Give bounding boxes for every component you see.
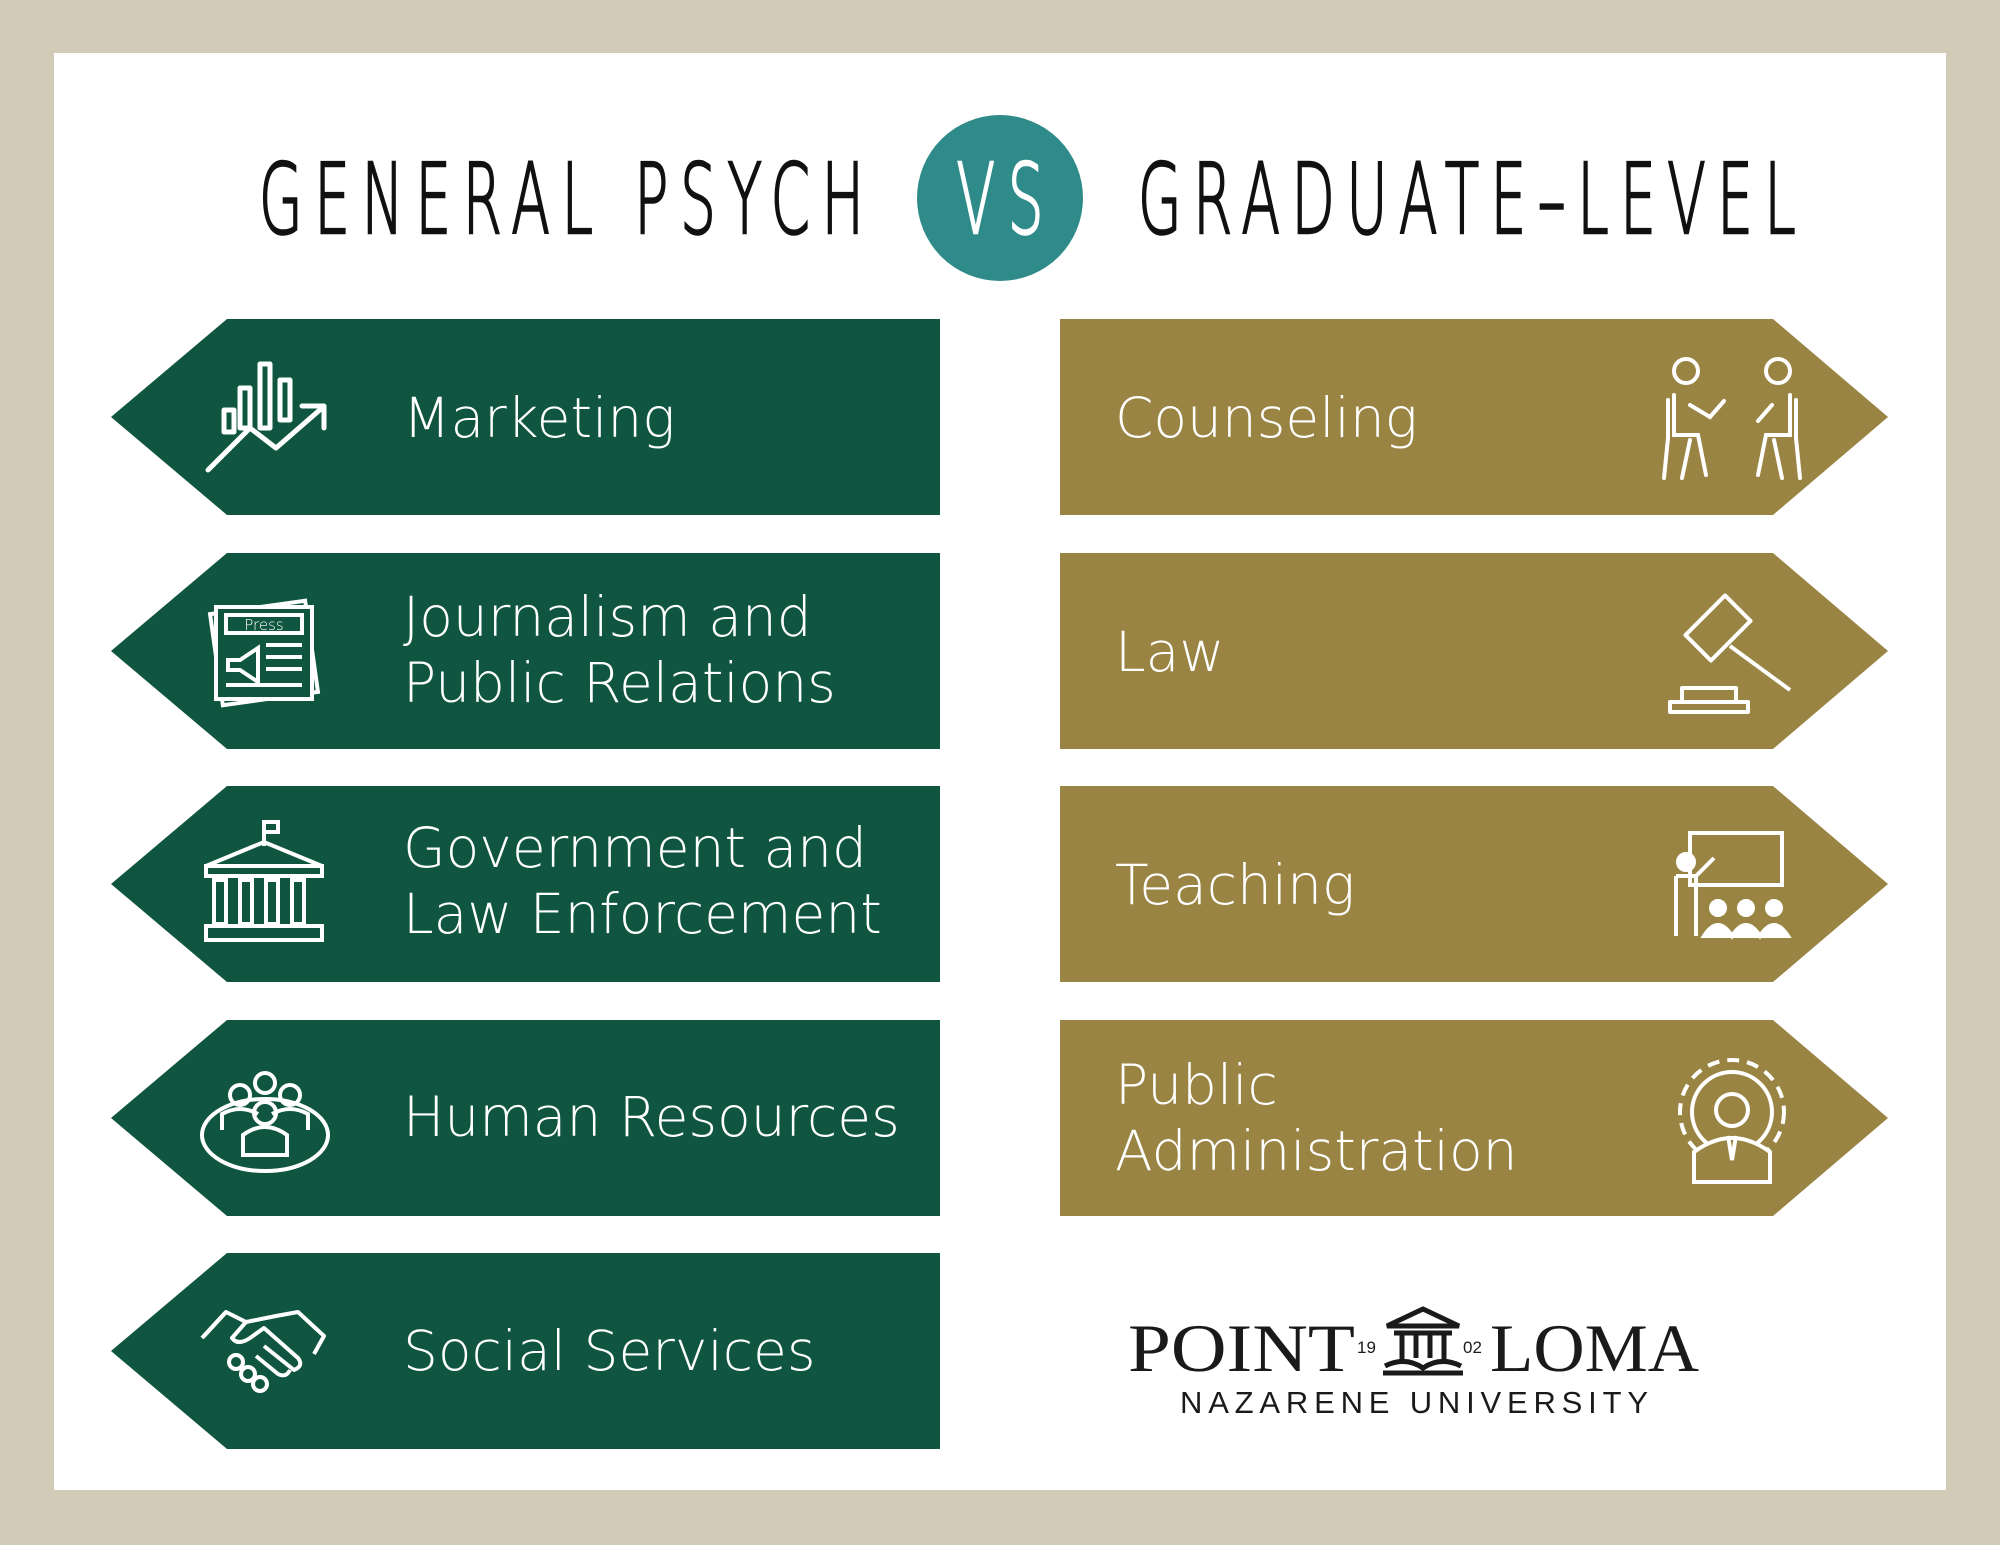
vs badge (917, 115, 1083, 281)
arrow: social services: Social Services (403, 1319, 815, 1383)
icon: press (210, 601, 318, 705)
icon: teacher (1676, 833, 1788, 936)
icon: press: Press (244, 616, 284, 634)
icon: chart (208, 364, 324, 470)
logo: point loma nazarene university: POINT (1128, 1310, 1355, 1386)
logo: point loma nazarene university: 19 (1357, 1338, 1376, 1357)
arrow: teaching (1060, 786, 1888, 982)
icon: people (202, 1073, 328, 1171)
arrow: marketing: Marketing (403, 386, 675, 450)
icon: handshake (202, 1312, 324, 1391)
title: graduate-level: GRADUATE–LEVEL (1138, 142, 1796, 256)
arrow: public administration: Administration (1115, 1119, 1517, 1183)
arrow: journalism: Public Relations (403, 651, 836, 715)
left column: general psych careers (111, 319, 940, 1449)
arrow: counseling (1060, 319, 1888, 515)
icon: gear person (1680, 1060, 1784, 1182)
arrow: human resources: Human Resources (403, 1085, 900, 1149)
arrow: government: Government and (403, 816, 867, 880)
arrow: journalism: Journalism and (403, 585, 812, 649)
arrow: teaching: Teaching (1115, 853, 1355, 917)
logo: point loma nazarene university: 02 (1463, 1338, 1482, 1357)
arrow: law (1060, 553, 1888, 749)
title: general psych: GENERAL PSYCH (259, 142, 864, 256)
logo: point loma nazarene university (1128, 1309, 1699, 1420)
arrow: public administration (1060, 1020, 1888, 1216)
arrow: journalism (111, 553, 940, 749)
icon: counseling (1664, 359, 1800, 478)
arrow: government: Law Enforcement (403, 882, 882, 946)
logo: point loma nazarene university: NAZARENE UNIVERSITY (1180, 1385, 1648, 1420)
arrow: marketing (111, 319, 940, 515)
vs badge: VS (957, 142, 1044, 256)
arrow: law: Law (1115, 620, 1224, 684)
right column: graduate-level careers (1060, 319, 1888, 1216)
icon: building (206, 822, 322, 940)
arrow: counseling: Counseling (1115, 386, 1418, 450)
logo: point loma nazarene university: LOMA (1490, 1310, 1699, 1386)
arrow: government (111, 786, 940, 982)
icon: gavel (1670, 595, 1790, 712)
arrow: social services (111, 1253, 940, 1449)
icon: building and book (1383, 1309, 1463, 1373)
arrow: public administration: Public (1115, 1053, 1278, 1117)
arrow: human resources (111, 1020, 940, 1216)
